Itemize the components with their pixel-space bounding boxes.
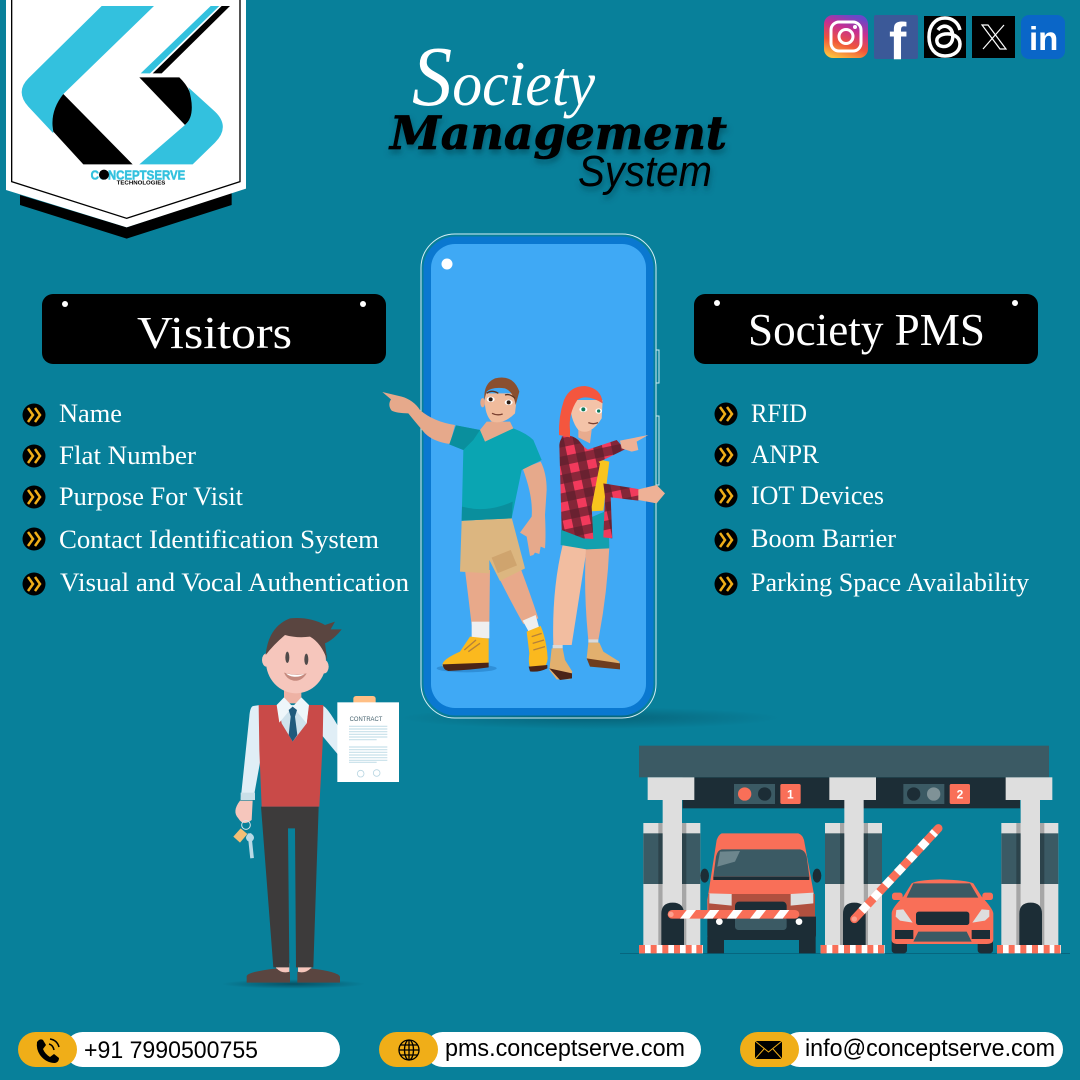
- icon: facebook: [874, 13, 918, 71]
- icon: instagram: [824, 15, 868, 58]
- list item: Visual and Vocal Authentication: Visual and Vocal Authentication: [60, 568, 409, 597]
- social icons: [824, 13, 1065, 71]
- list item: Name: Name: [59, 399, 122, 428]
- contract document: [337, 696, 399, 782]
- booth 1: [639, 777, 703, 953]
- icon: X: [972, 16, 1015, 58]
- contact: email: info@conceptserve.com: [805, 1035, 1055, 1062]
- list item: Name: [22, 399, 122, 428]
- list item: RFID: RFID: [751, 399, 807, 428]
- icon: linkedin: in: [1029, 20, 1058, 57]
- contact: phone: [18, 1032, 340, 1067]
- list item: Flat Number: Flat Number: [59, 441, 196, 470]
- heading: Society PMS: Society PMS: [748, 304, 985, 355]
- list item: IOT Devices: IOT Devices: [751, 481, 884, 510]
- panel: society pms: [694, 294, 1038, 597]
- list item: ANPR: ANPR: [751, 440, 820, 469]
- icon: keys: [233, 821, 254, 858]
- booth 3: [997, 777, 1061, 953]
- phone shadow: [400, 707, 780, 729]
- list item: Contact Identification System: Contact Identification System: [59, 525, 379, 554]
- panel: visitors: [22, 294, 409, 597]
- boom barrier closed: [668, 910, 799, 919]
- traffic signal 1: 1: [787, 788, 794, 802]
- man character: [382, 377, 548, 672]
- contact: email: [740, 1032, 1063, 1067]
- traffic signal 2: [903, 784, 970, 804]
- traffic signal 1: [734, 784, 801, 804]
- logo badge: TECHNOLOGIES: [117, 181, 166, 187]
- list: visitors: [22, 399, 409, 597]
- phone: [421, 234, 659, 718]
- logo badge: [6, 0, 246, 239]
- list item: Parking Space Availability: Parking Space Availability: [751, 568, 1029, 597]
- icon: linkedin: [1021, 15, 1065, 59]
- booth 2: [821, 777, 885, 953]
- list item: ANPR: [714, 440, 820, 469]
- icon: globe: [399, 1040, 419, 1060]
- title: [388, 28, 727, 196]
- title line: Management: Management: [388, 106, 727, 160]
- illustration: man holding contract and keys: [222, 618, 399, 989]
- traffic signal 2: 2: [957, 788, 964, 802]
- icon: facebook: f: [889, 13, 907, 71]
- contact: website: pms.conceptserve.com: [445, 1035, 685, 1062]
- list item: Boom Barrier: Boom Barrier: [751, 524, 896, 553]
- list item: RFID: [714, 399, 807, 428]
- icon: envelope: [755, 1041, 782, 1059]
- icon: threads: [924, 16, 966, 58]
- illustration: toll gate with boom barriers: [620, 746, 1070, 954]
- icon: phone: [37, 1039, 59, 1063]
- van: [700, 833, 821, 953]
- characters pointing: [382, 377, 665, 680]
- heading: Society PMS: [694, 294, 1038, 364]
- contact: phone: +91 7990500755: [84, 1037, 258, 1064]
- logo badge: CONCEPTSERVE: [91, 167, 186, 182]
- list: society pms: [714, 399, 1029, 597]
- contract document: CONTRACT: [350, 716, 382, 723]
- heading: Visitors: [42, 294, 386, 364]
- title line: System: System: [578, 147, 712, 196]
- car: [892, 879, 993, 953]
- woman character: [549, 386, 665, 680]
- list item: Purpose For Visit: Purpose For Visit: [59, 482, 244, 511]
- contact: website: [379, 1032, 701, 1067]
- title line: Society: Society: [412, 28, 596, 124]
- boom barrier open: [852, 828, 938, 922]
- heading: Visitors: Visitors: [137, 307, 292, 358]
